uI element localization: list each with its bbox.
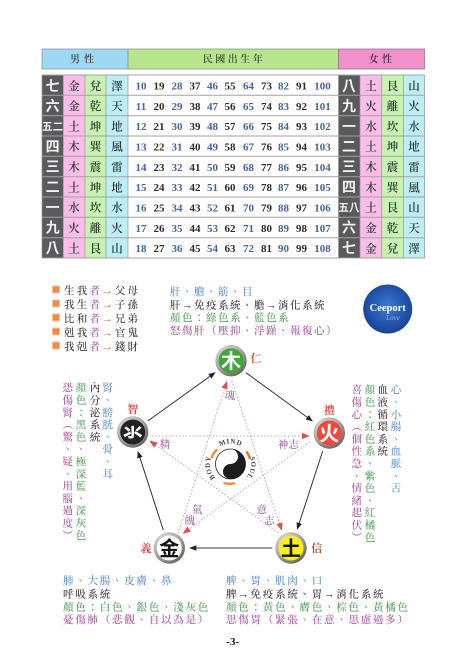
birth year numbers: 69 [243, 182, 254, 194]
birth year numbers: 105 [314, 182, 331, 194]
birth year numbers: 107 [314, 223, 331, 235]
node: wood: 木 [221, 350, 241, 373]
birth year numbers: 52 [207, 202, 218, 214]
birth year numbers: 79 [261, 202, 272, 214]
birth year numbers: 62 [224, 223, 236, 235]
birth year numbers: 43 [190, 202, 201, 214]
node: earth: 土 [281, 537, 301, 560]
female trigram columns: 七 [342, 240, 356, 256]
center: yin yang with mind body soul [205, 438, 256, 486]
female trigram columns: 火 [365, 99, 377, 113]
birth year numbers: 32 [172, 162, 183, 174]
female trigram columns [338, 78, 420, 256]
female trigram columns: 艮 [387, 80, 399, 93]
virtue labels: 禮 [324, 403, 335, 417]
table header: male [42, 49, 128, 69]
female trigram columns: 山 [408, 200, 420, 214]
birth year numbers: 76 [261, 142, 272, 154]
birth year numbers: 98 [296, 223, 308, 235]
table header: female: 女性 [368, 52, 396, 66]
birth year numbers: 35 [172, 223, 183, 235]
node: fire [314, 417, 345, 449]
male trigram columns: 水 [111, 200, 123, 214]
birth year numbers: 16 [136, 202, 147, 214]
spirit labels: 魄 [185, 514, 196, 527]
female trigram columns: 木 [365, 180, 377, 194]
female trigram columns: 雷 [408, 160, 420, 174]
birth year numbers: 37 [190, 80, 201, 92]
female trigram columns: 天 [408, 222, 420, 235]
vertical text: water / kidney: 腎、膀胱、骨、耳 [101, 381, 112, 480]
text block: metal / lung: 呼吸系統 [63, 588, 112, 600]
birth year numbers: 44 [190, 223, 201, 235]
text block: wood / liver: 肝、膽、筋、目 [170, 285, 254, 298]
text block: earth / spleen: 顏色：黃色、膚色、棕色、黃橘色 [226, 600, 410, 614]
birth year numbers: 90 [278, 243, 290, 255]
birth year numbers: 59 [224, 162, 236, 174]
birth year numbers: 17 [136, 223, 147, 235]
virtue labels: 仁 [250, 351, 262, 365]
female trigram columns: 八 [342, 78, 356, 94]
female trigram columns: 火 [408, 99, 420, 113]
birth year numbers: 13 [136, 142, 147, 154]
birth year numbers: 41 [190, 162, 200, 174]
birth year numbers: 38 [190, 101, 201, 113]
birth year numbers: 53 [207, 223, 218, 235]
male trigram columns: 坎 [90, 200, 102, 214]
female trigram columns: 金 [365, 221, 377, 235]
pentagon arrows: generating cycle [138, 373, 323, 548]
female trigram columns: 澤 [408, 242, 420, 256]
birth year numbers: 88 [278, 202, 290, 214]
vertical text: fire / heart [349, 383, 401, 544]
birth year numbers: 94 [296, 142, 308, 154]
birth year numbers: 93 [296, 121, 308, 133]
legend list: relationships [52, 284, 140, 353]
birth year numbers: 106 [314, 202, 331, 214]
birth year numbers: 102 [314, 121, 331, 133]
text block: earth / spleen [226, 574, 410, 626]
male trigram columns: 坤 [90, 120, 102, 134]
birth year numbers: 31 [172, 142, 182, 154]
text block: wood / liver: 肝→免疫系統、膽→消化系統 [170, 298, 326, 312]
legend list: relationships: 比和者→兄弟 [64, 312, 140, 325]
birth year numbers: 65 [243, 101, 254, 113]
male trigram columns: 二 [46, 179, 60, 195]
birth year numbers: 24 [154, 182, 165, 194]
birth year numbers: 75 [261, 121, 272, 133]
female trigram columns: 土 [365, 140, 377, 154]
birth year numbers: 48 [207, 121, 218, 133]
star: dotted control cycle [150, 381, 310, 533]
text block: metal / lung [63, 574, 210, 626]
birth year numbers: 99 [296, 243, 308, 255]
male trigram columns: 土 [68, 180, 80, 194]
text block: earth / spleen: 脾、胃、肌肉、口 [226, 574, 324, 587]
node: water: 氺 [123, 422, 143, 444]
birth year numbers: 70 [243, 202, 254, 214]
female trigram columns: 水 [365, 120, 377, 134]
legend list: relationships: 我生者→子孫 [64, 298, 140, 311]
vertical text: water / kidney: 恐傷腎（驚、疑、用腦過度） [61, 382, 72, 542]
male trigram columns: 五二 [42, 121, 63, 133]
male trigram columns: 金 [68, 79, 80, 93]
male trigram columns: 土 [68, 242, 80, 256]
birth year numbers: 11 [136, 101, 146, 113]
female trigram columns: 五八 [338, 202, 360, 214]
birth year numbers: 49 [207, 142, 218, 154]
birth year numbers: 23 [154, 162, 165, 174]
female trigram columns: 坤 [387, 140, 399, 154]
birth year numbers: 51 [207, 182, 218, 194]
text block: metal / lung: 憂傷肺（悲觀、自以為是） [63, 613, 210, 626]
birth year numbers: 34 [172, 202, 183, 214]
male trigram columns: 艮 [90, 242, 102, 256]
male trigram columns: 一 [46, 200, 60, 216]
birth year numbers: 10 [136, 80, 147, 92]
birth year numbers: 100 [314, 80, 331, 92]
spirit labels: 意 [256, 504, 267, 516]
birth year numbers: 30 [172, 121, 183, 133]
text block: wood / liver: 怒傷肝（壓抑、浮躁、報復心） [170, 324, 338, 337]
male trigram columns: 地 [111, 120, 123, 134]
vertical text: fire / heart: 血液循環系統 [376, 383, 387, 458]
birth year numbers: 20 [154, 101, 165, 113]
legend list: relationships: 我剋者→錢財 [64, 340, 140, 353]
virtue labels [127, 351, 335, 555]
female trigram columns: 乾 [387, 221, 399, 235]
birth year numbers: 97 [296, 202, 308, 214]
vertical text: fire / heart: 喜傷心（個性急、情緒起伏） [349, 383, 361, 544]
spirit labels: 精 [160, 438, 171, 450]
vertical text: water / kidney: 顏色：黑色、極深藍、深灰色 [74, 381, 86, 542]
male trigram columns: 乾 [90, 99, 102, 113]
text block: metal / lung: 顏色：白色、銀色、淺灰色 [63, 600, 210, 614]
female trigram columns: 山 [408, 79, 420, 93]
birth year numbers: 45 [190, 243, 201, 255]
female trigram columns: 坎 [387, 120, 399, 134]
female trigram columns: 艮 [387, 202, 399, 214]
table header: birth year [128, 49, 338, 69]
female trigram columns: 三 [342, 158, 356, 174]
birth year numbers: 92 [296, 101, 308, 113]
male trigram columns: 火 [68, 221, 80, 235]
vertical text: fire / heart: 心、小腸、血脈、舌 [389, 384, 401, 495]
birth year numbers: 29 [172, 101, 183, 113]
legend list: relationships: 剋我者→官鬼 [64, 326, 140, 339]
male trigram columns: 金 [68, 99, 80, 113]
male trigram columns: 風 [111, 140, 123, 154]
female trigram columns: 土 [365, 200, 377, 214]
birth year numbers: 96 [296, 182, 308, 194]
node: water [117, 416, 148, 448]
male trigram columns: 山 [111, 242, 123, 256]
birth year numbers: 71 [243, 223, 254, 235]
female trigram columns: 巽 [387, 182, 400, 194]
birth year numbers: 28 [172, 80, 183, 92]
logo: Ceeport: Love [385, 314, 400, 322]
birth year numbers: 19 [154, 80, 165, 92]
birth year numbers: 66 [243, 121, 254, 133]
birth year numbers: 36 [172, 243, 183, 255]
table header: birth year: 民國出生年 [203, 52, 265, 66]
birth year numbers: 22 [154, 142, 165, 154]
female trigram columns: 六 [342, 220, 356, 236]
male trigram columns: 四 [46, 138, 60, 154]
center: yin yang with mind body soul: SOUL [246, 456, 256, 478]
birth year numbers: 104 [314, 162, 331, 174]
logo: Ceeport: Ceeport [370, 303, 406, 314]
vertical text: fire / heart: 顏色：紅色系、紫色、紅橘色 [364, 383, 375, 544]
male trigram columns: 兌 [90, 79, 102, 93]
birth year numbers: 12 [136, 121, 147, 133]
birth year numbers: 78 [261, 182, 272, 194]
male trigram columns: 震 [90, 160, 102, 174]
male trigram columns: 三 [46, 158, 60, 174]
female trigram columns: 土 [365, 79, 377, 93]
birth year numbers: 86 [278, 162, 290, 174]
birth year numbers: 91 [296, 80, 307, 92]
birth year numbers: 27 [154, 243, 165, 255]
table header: female [338, 49, 424, 69]
page number: -3- [226, 636, 239, 648]
birth year numbers: 64 [243, 80, 254, 92]
male trigram columns: 坤 [90, 180, 102, 194]
center: yin yang with mind body soul: MIND [218, 438, 242, 446]
birth year numbers: 67 [243, 142, 254, 154]
female trigram columns: 兌 [387, 242, 399, 256]
female trigram columns: 金 [365, 242, 377, 256]
birth year numbers: 57 [224, 121, 236, 133]
birth year numbers: 46 [207, 80, 218, 92]
birth year numbers: 14 [136, 162, 147, 174]
birth year numbers: 47 [207, 101, 218, 113]
male trigram columns: 木 [68, 160, 80, 174]
node: fire: 火 [319, 423, 339, 445]
text block: earth / spleen: 脾→免疫系統、胃→消化系統 [226, 588, 385, 600]
vertical text: water / kidney: 內分泌系統 [88, 382, 100, 444]
center: yin yang with mind body soul: BODY [205, 456, 216, 480]
node: wood [215, 345, 247, 376]
male trigram columns: 火 [111, 221, 123, 235]
male trigram columns: 地 [111, 180, 123, 194]
male trigram columns: 雷 [111, 160, 123, 174]
node: metal: 金 [159, 536, 179, 560]
birth year numbers: 73 [261, 80, 272, 92]
birth year numbers: 60 [224, 182, 236, 194]
male trigram columns: 天 [111, 100, 123, 113]
birth year numbers: 61 [224, 202, 236, 214]
table header: male: 男性 [70, 52, 98, 66]
birth year numbers [136, 80, 331, 255]
spirit labels [160, 389, 299, 527]
male trigram columns: 八 [46, 240, 60, 256]
spirit labels: 氣 [192, 503, 203, 516]
birth year numbers: 108 [314, 243, 331, 255]
birth year numbers: 63 [224, 243, 236, 255]
node: metal [154, 532, 185, 564]
male trigram columns: 木 [68, 140, 80, 154]
birth year numbers: 87 [278, 182, 290, 194]
birth year numbers: 40 [190, 142, 201, 154]
birth year numbers: 18 [136, 243, 147, 255]
birth year numbers: 77 [261, 162, 272, 174]
male trigram columns: 澤 [111, 80, 123, 93]
birth year numbers: 58 [224, 142, 236, 154]
female trigram columns: 四 [342, 179, 356, 195]
birth year numbers: 25 [154, 202, 165, 214]
birth year numbers: 82 [278, 80, 290, 92]
male trigram columns [42, 78, 123, 256]
birth year numbers: 42 [190, 182, 201, 194]
birth year numbers: 85 [278, 142, 290, 154]
birth year numbers: 33 [172, 182, 183, 194]
spirit labels: 志 [264, 514, 275, 527]
female trigram columns: 一 [342, 118, 356, 134]
male trigram columns: 土 [68, 120, 80, 134]
spirit labels: 神志 [278, 438, 299, 451]
logo: Ceeport [363, 284, 412, 334]
text block: metal / lung: 肺、大腸、皮膚、鼻 [63, 574, 173, 587]
birth year numbers: 54 [207, 243, 218, 255]
male trigram columns: 九 [46, 220, 60, 236]
birth year numbers: 101 [314, 101, 331, 113]
birth year numbers: 55 [224, 80, 236, 92]
male trigram columns: 離 [90, 221, 102, 235]
birth year numbers: 15 [136, 182, 147, 194]
table body background [42, 75, 425, 258]
birth year numbers: 56 [224, 101, 236, 113]
text block: wood / liver [170, 285, 338, 337]
birth year numbers: 89 [278, 223, 290, 235]
female trigram columns: 九 [342, 98, 356, 114]
spirit labels: 魂 [225, 389, 236, 402]
female trigram columns: 震 [387, 160, 399, 174]
node: earth [275, 532, 307, 564]
birth year numbers: 74 [261, 101, 272, 113]
birth year numbers: 21 [154, 121, 164, 133]
birth year numbers: 81 [261, 243, 272, 255]
virtue labels: 智 [127, 402, 138, 416]
female trigram columns: 風 [408, 182, 420, 194]
birth year numbers: 72 [243, 243, 254, 255]
legend list: relationships: 生我者→父母 [64, 284, 140, 297]
birth year numbers: 68 [243, 162, 254, 174]
male trigram columns: 七 [46, 78, 60, 94]
birth year numbers: 39 [190, 121, 201, 133]
birth year numbers: 103 [314, 142, 331, 154]
birth year numbers: 50 [207, 162, 218, 174]
vertical text: water / kidney [61, 381, 112, 542]
birth year numbers: 84 [278, 121, 290, 133]
birth year numbers: 83 [278, 101, 290, 113]
female trigram columns: 離 [387, 99, 399, 113]
female trigram columns: 水 [408, 120, 420, 134]
female trigram columns: 地 [408, 140, 420, 154]
female trigram columns: 木 [365, 160, 377, 174]
birth year numbers: 80 [261, 223, 272, 235]
male trigram columns: 六 [46, 98, 60, 114]
text block: earth / spleen: 思傷胃（緊張、在意、思慮過多） [226, 613, 410, 626]
birth year numbers: 95 [296, 162, 308, 174]
text block: wood / liver: 顏色：綠色系、藍色系 [170, 311, 290, 324]
female trigram columns: 二 [342, 138, 356, 154]
male trigram columns: 巽 [90, 140, 103, 154]
virtue labels: 義 [140, 541, 152, 555]
birth year numbers: 26 [154, 223, 165, 235]
male trigram columns: 水 [68, 200, 80, 214]
virtue labels: 信 [311, 541, 322, 555]
